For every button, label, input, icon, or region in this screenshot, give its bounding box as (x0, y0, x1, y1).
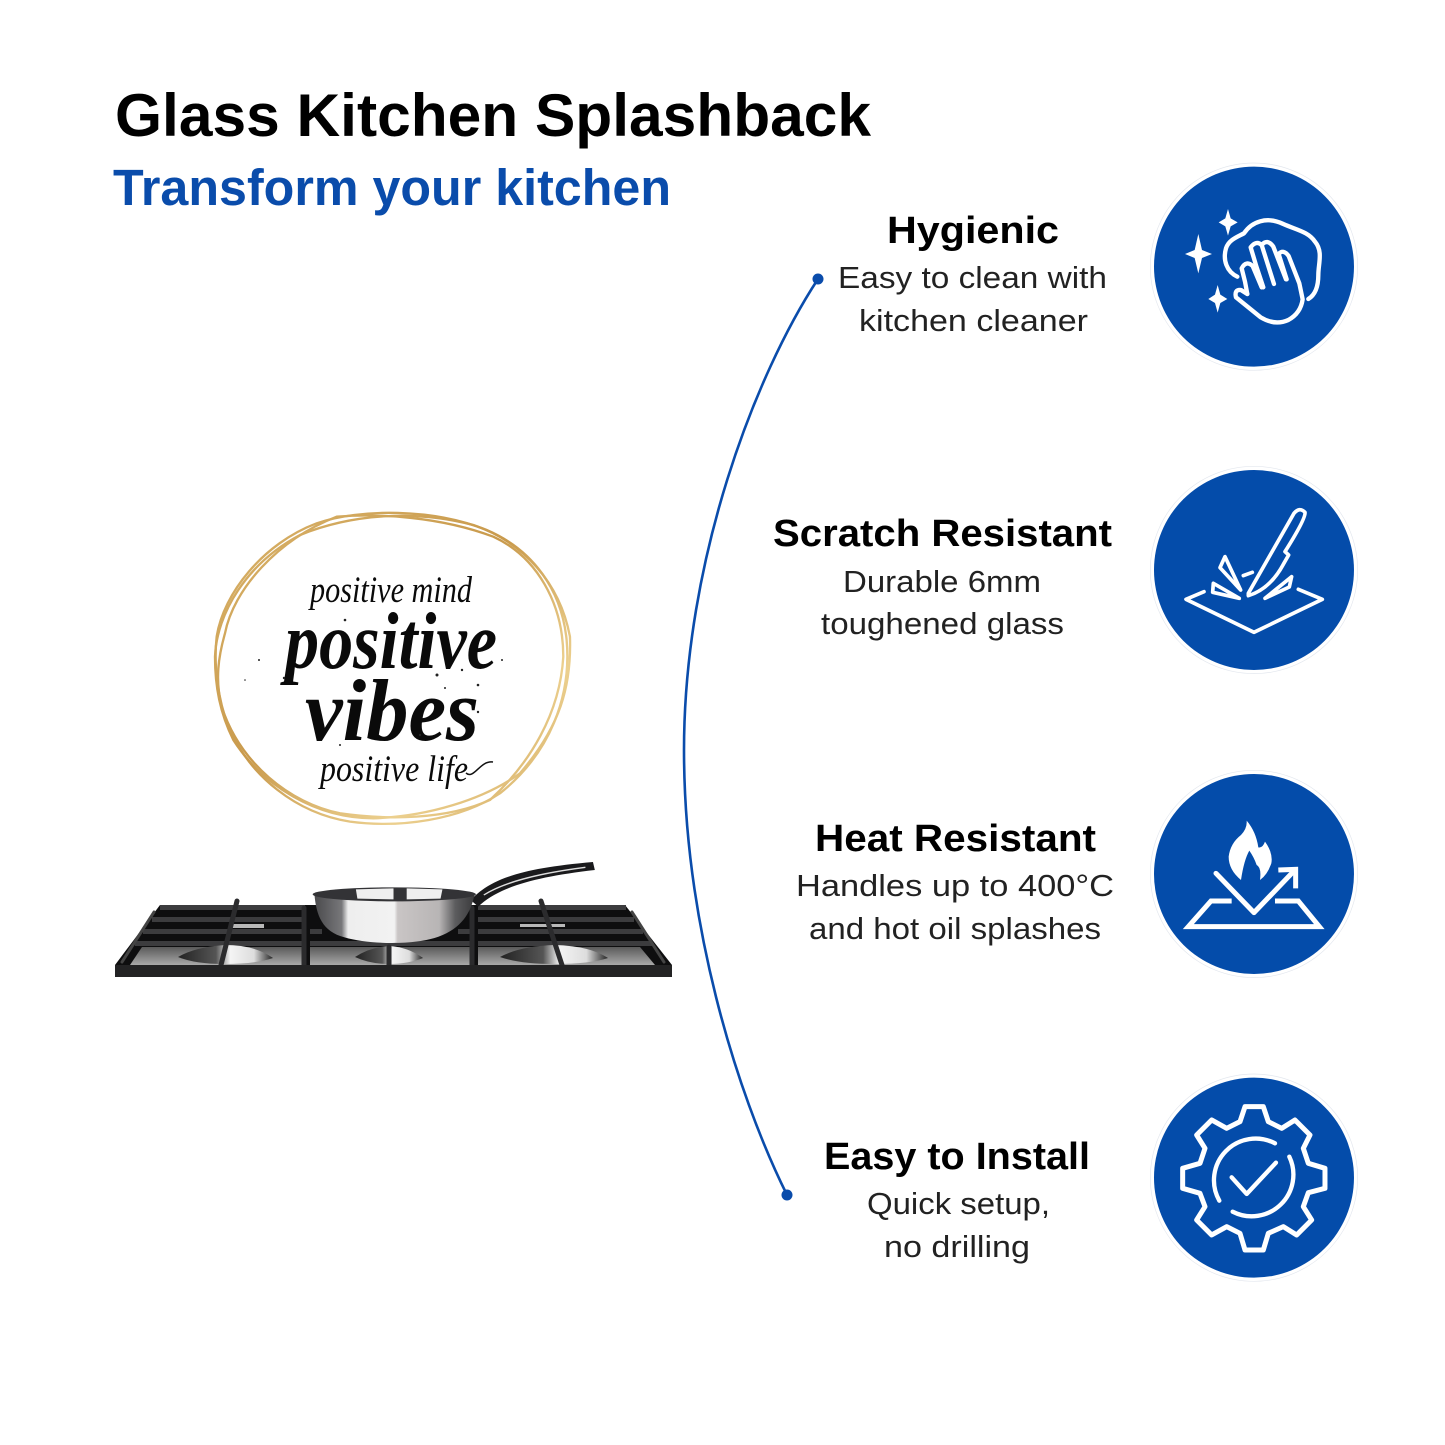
icon: cleaning hand (1150, 163, 1358, 370)
connector curve (684, 274, 824, 1200)
pan bowl (314, 895, 474, 943)
heading: Scratch Resistant (773, 513, 1112, 555)
description: kitchen cleaner (859, 303, 1088, 338)
description: Quick setup, (867, 1186, 1050, 1221)
gas hob with pan (115, 862, 672, 977)
grate cross bars (122, 901, 664, 965)
connector bottom dot (782, 1190, 792, 1200)
subtitle: Transform your kitchen (113, 159, 671, 216)
heading: Easy to Install (824, 1136, 1090, 1178)
grate bars (135, 905, 652, 946)
hob base (115, 905, 672, 977)
connector top dot (812, 274, 824, 284)
lettering: vibes: vibes (305, 663, 479, 760)
icon: flame on surface (1150, 770, 1358, 978)
lettering: positive: positive (280, 598, 497, 686)
feature: hygienic (838, 210, 1107, 338)
heading: Heat Resistant (815, 818, 1096, 860)
description: toughened glass (821, 606, 1064, 641)
feature: heat resistant (796, 818, 1114, 946)
gold wire rings (215, 513, 570, 824)
heading: Hygienic (887, 210, 1059, 252)
lettering: positive life: positive life (317, 749, 468, 790)
feature: easy to install (824, 1136, 1090, 1264)
title: Glass Kitchen Splashback (115, 82, 872, 149)
description: Durable 6mm (843, 564, 1041, 599)
lettering: positive mind: positive mind (308, 570, 472, 611)
description (867, 1186, 1050, 1264)
pan handle (471, 862, 595, 907)
feature: scratch resistant (773, 513, 1112, 641)
hob front edge (115, 965, 672, 977)
lettering flourish (466, 762, 493, 774)
description (821, 564, 1064, 641)
ink splatter (244, 619, 503, 746)
description: and hot oil splashes (809, 911, 1101, 946)
description (838, 260, 1107, 338)
upper burners (232, 924, 565, 928)
description: no drilling (884, 1229, 1030, 1264)
icon: gear with check (1150, 1074, 1358, 1281)
pan handle highlight (484, 867, 585, 895)
description (796, 868, 1114, 946)
description: Handles up to 400°C (796, 868, 1114, 903)
pan rim (313, 887, 476, 901)
pan interior highlights (356, 888, 442, 899)
burners (178, 945, 608, 964)
description: Easy to clean with (838, 260, 1107, 295)
splashback artwork: positive vibes (215, 513, 570, 824)
icon: knife on glass (1150, 466, 1358, 674)
hob steel plates (130, 947, 655, 965)
